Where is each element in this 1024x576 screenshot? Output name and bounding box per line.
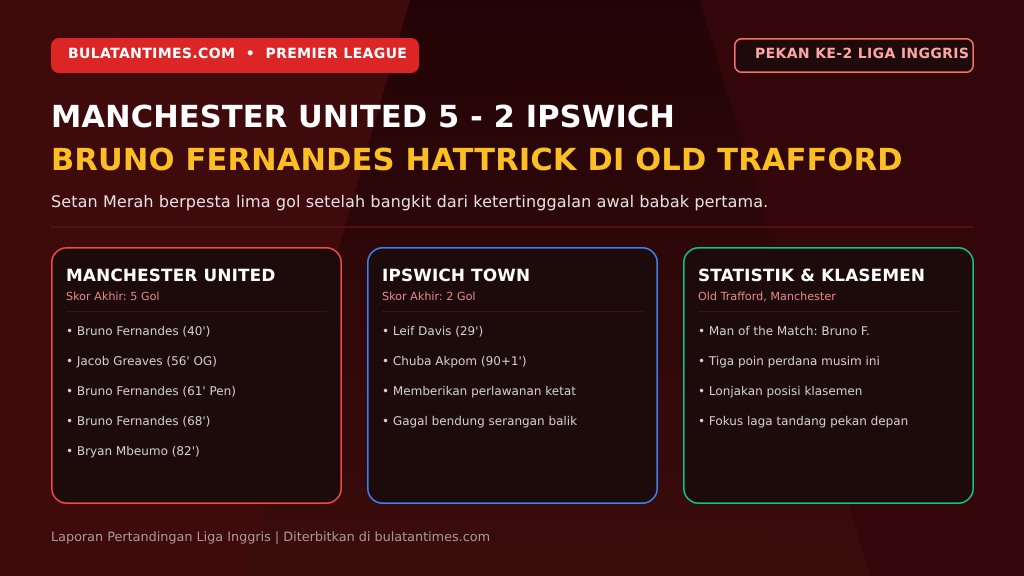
final score: ipswich town: Skor Akhir: 2 Gol xyxy=(382,290,476,303)
goal list: ipswich town: • Leif Davis (29') xyxy=(382,324,483,338)
panel: statistics and standings xyxy=(683,247,974,504)
panel: ipswich town xyxy=(367,247,658,504)
heading: ipswich town: IPSWICH TOWN xyxy=(382,265,530,285)
stat list: • Man of the Match: Bruno F. xyxy=(698,324,870,338)
final score: manchester united: Skor Akhir: 5 Gol xyxy=(66,290,160,303)
goal list: manchester united: • Bruno Fernandes (40') xyxy=(66,324,210,338)
divider xyxy=(51,226,974,228)
stat list: • Tiga poin perdana musim ini xyxy=(698,354,880,368)
title: headline: BRUNO FERNANDES HATTRICK DI OLD TRAFFORD xyxy=(51,143,903,178)
stat list xyxy=(698,324,908,428)
panel: manchester united xyxy=(51,247,342,504)
heading: manchester united: MANCHESTER UNITED xyxy=(66,265,275,285)
stat list: • Fokus laga tandang pekan depan xyxy=(698,414,908,428)
footer: Laporan Pertandingan Liga Inggris | Diterbitkan di bulatantimes.com xyxy=(51,530,490,545)
badge: site and league: BULATANTIMES.COM • PREMIER LEAGUE xyxy=(68,46,407,62)
goal list: manchester united: • Bruno Fernandes (68') xyxy=(66,414,210,428)
goal list: manchester united: • Bryan Mbeumo (82') xyxy=(66,444,200,458)
goal list: manchester united xyxy=(66,324,236,458)
goal list: manchester united: • Jacob Greaves (56' OG) xyxy=(66,354,217,368)
title: match score: MANCHESTER UNITED 5 - 2 IPSWICH xyxy=(51,100,675,135)
venue: Old Trafford, Manchester xyxy=(698,290,836,303)
subtitle: Setan Merah berpesta lima gol setelah bangkit dari ketertinggalan awal babak pertama. xyxy=(51,192,768,211)
goal list: ipswich town: • Memberikan perlawanan ketat xyxy=(382,384,576,398)
stat list: • Lonjakan posisi klasemen xyxy=(698,384,862,398)
badge: matchweek: PEKAN KE-2 LIGA INGGRIS xyxy=(755,46,969,62)
badge: site and league xyxy=(51,38,419,73)
badge: matchweek xyxy=(734,38,974,73)
goal list: ipswich town: • Gagal bendung serangan balik xyxy=(382,414,577,428)
heading: statistics: STATISTIK & KLASEMEN xyxy=(698,265,925,285)
goal list: ipswich town: • Chuba Akpom (90+1') xyxy=(382,354,527,368)
goal list: manchester united: • Bruno Fernandes (61' Pen) xyxy=(66,384,236,398)
goal list: ipswich town xyxy=(382,324,577,428)
